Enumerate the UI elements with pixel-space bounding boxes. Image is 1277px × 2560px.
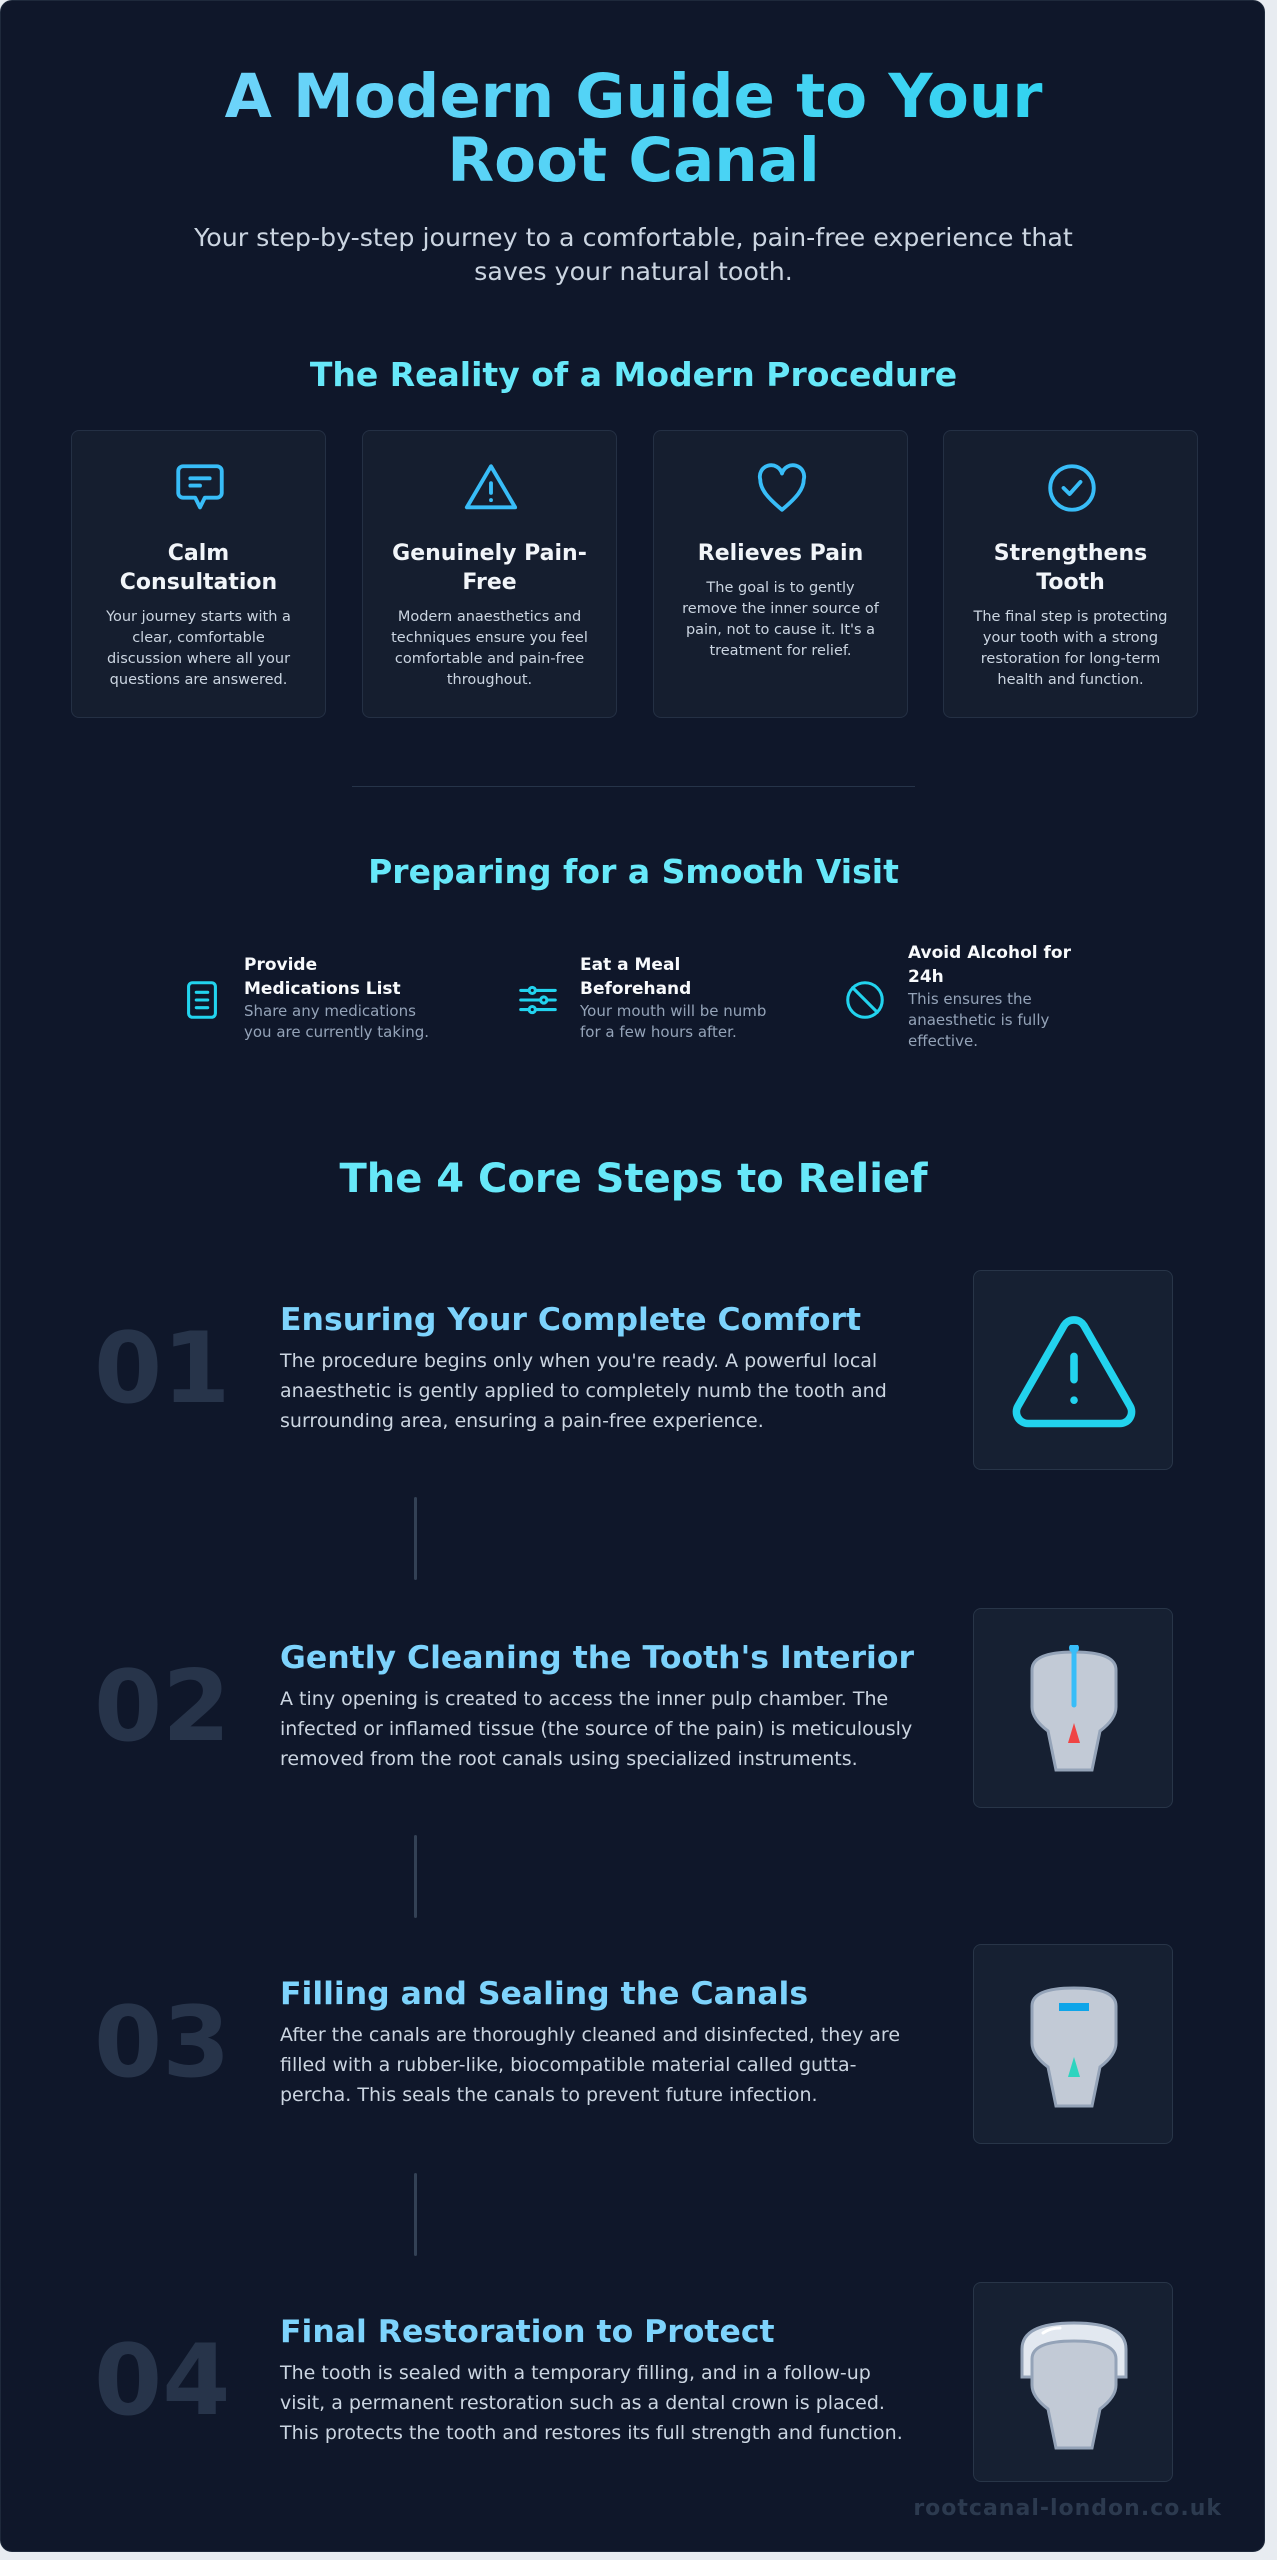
step 1: [94, 1270, 1173, 1470]
icon box: tooth filling: [973, 1944, 1173, 2144]
icon: list: [187, 981, 217, 1019]
step 4: The tooth is sealed with a temporary filling, and in a follow-up visit, a permanent restoration such as a dental crown is placed. This protects the tooth and restores its full strength and function.: [280, 2362, 903, 2444]
subtitle: [194, 223, 1073, 286]
icon: chat bubble: [176, 464, 224, 510]
step 2: 02: [94, 1650, 230, 1764]
card: strengthens tooth: [943, 430, 1198, 718]
prep item: alcohol: [846, 943, 1071, 1050]
step 1: The procedure begins only when you're ready. A powerful local anaesthetic is gently applied to completely numb the tooth and surrounding area, ensuring a pain-free experience.: [280, 1350, 887, 1432]
card: strengthens tooth: Strengthens: [994, 541, 1147, 566]
step 2: Gently Cleaning the Tooth's Interior: [280, 1640, 914, 1676]
card: calm consultation: Your journey starts with a clear, comfortable discussion where all your questions are answered.: [106, 609, 291, 688]
card: pain free: Free: [462, 570, 517, 595]
card: strengthens tooth: Tooth: [1036, 570, 1105, 595]
step 3: After the canals are thoroughly cleaned and disinfected, they are filled with a rubber-like, biocompatible material called gutta-percha. This seals the canals to prevent future infection.: [280, 2024, 900, 2106]
card: relieves pain: The goal is to gently remove the inner source of pain, not to cause it. It's a treatment for relief.: [682, 580, 879, 659]
card: strengthens tooth: The final step is protecting your tooth with a strong restoration for long-term health and function.: [974, 609, 1168, 688]
title: Root Canal: [447, 125, 820, 196]
prep item: alcohol: 24h: [908, 967, 944, 987]
icon box: tooth cleaning: [973, 1608, 1173, 1808]
prep item: meal: Your mouth will be numb for a few hours after.: [580, 1002, 766, 1041]
card: pain free: [362, 430, 617, 718]
icon: heart: [758, 463, 806, 512]
icon: ban: [846, 981, 884, 1019]
icon: warning: [464, 464, 518, 510]
title: [1, 65, 1266, 193]
prep item: medications: Medications List: [244, 979, 401, 999]
heading: reality: The Reality of a Modern Procedure: [310, 355, 957, 394]
heading: preparing: Preparing for a Smooth Visit: [368, 852, 899, 891]
step 4: Final Restoration to Protect: [280, 2314, 775, 2350]
card: calm consultation: [71, 430, 326, 718]
prep item: meal: [519, 955, 766, 1041]
title: A Modern Guide to Your: [225, 61, 1042, 132]
card: pain free: Genuinely Pain-: [392, 541, 587, 566]
prep item: medications: [187, 955, 429, 1041]
heading: core steps: The 4 Core Steps to Relief: [339, 1156, 928, 1202]
icon: sliders: [519, 986, 557, 1014]
step 3: 03: [94, 1986, 230, 2100]
step 1: Ensuring Your Complete Comfort: [280, 1302, 861, 1338]
subtitle: saves your natural tooth.: [474, 257, 793, 286]
step 4: [94, 2282, 1173, 2482]
prep item: medications: Provide: [244, 955, 317, 975]
icon: check circle: [1048, 464, 1096, 512]
step 3: Filling and Sealing the Canals: [280, 1976, 808, 2012]
prep item: medications: Share any medications you are currently taking.: [244, 1002, 429, 1041]
card: calm consultation: Consultation: [120, 570, 277, 595]
prep item: alcohol: This ensures the anaesthetic is fully effective.: [908, 990, 1049, 1050]
step 1: 01: [94, 1312, 230, 1426]
step 4: 04: [94, 2324, 230, 2438]
card: relieves pain: Relieves Pain: [698, 541, 863, 566]
card: relieves pain: [653, 430, 908, 718]
step 3: [94, 1944, 1173, 2144]
prep item: meal: Eat a Meal: [580, 955, 680, 975]
card: pain free: Modern anaesthetics and techniques ensure you feel comfortable and pain-free throughout.: [391, 609, 588, 688]
footer: rootcanal-london.co.uk: [913, 2496, 1222, 2521]
subtitle: Your step-by-step journey to a comfortable, pain-free experience that: [194, 223, 1073, 252]
step 2: [94, 1608, 1173, 1808]
icon box: warning: [973, 1270, 1173, 1470]
prep item: alcohol: Avoid Alcohol for: [908, 943, 1071, 963]
step 2: A tiny opening is created to access the inner pulp chamber. The infected or inflamed tissue (the source of the pain) is meticulously removed from the root canals using specialized instruments.: [280, 1688, 912, 1770]
icon box: tooth crown: [973, 2282, 1173, 2482]
prep item: meal: Beforehand: [580, 979, 691, 999]
card: calm consultation: Calm: [168, 541, 229, 566]
